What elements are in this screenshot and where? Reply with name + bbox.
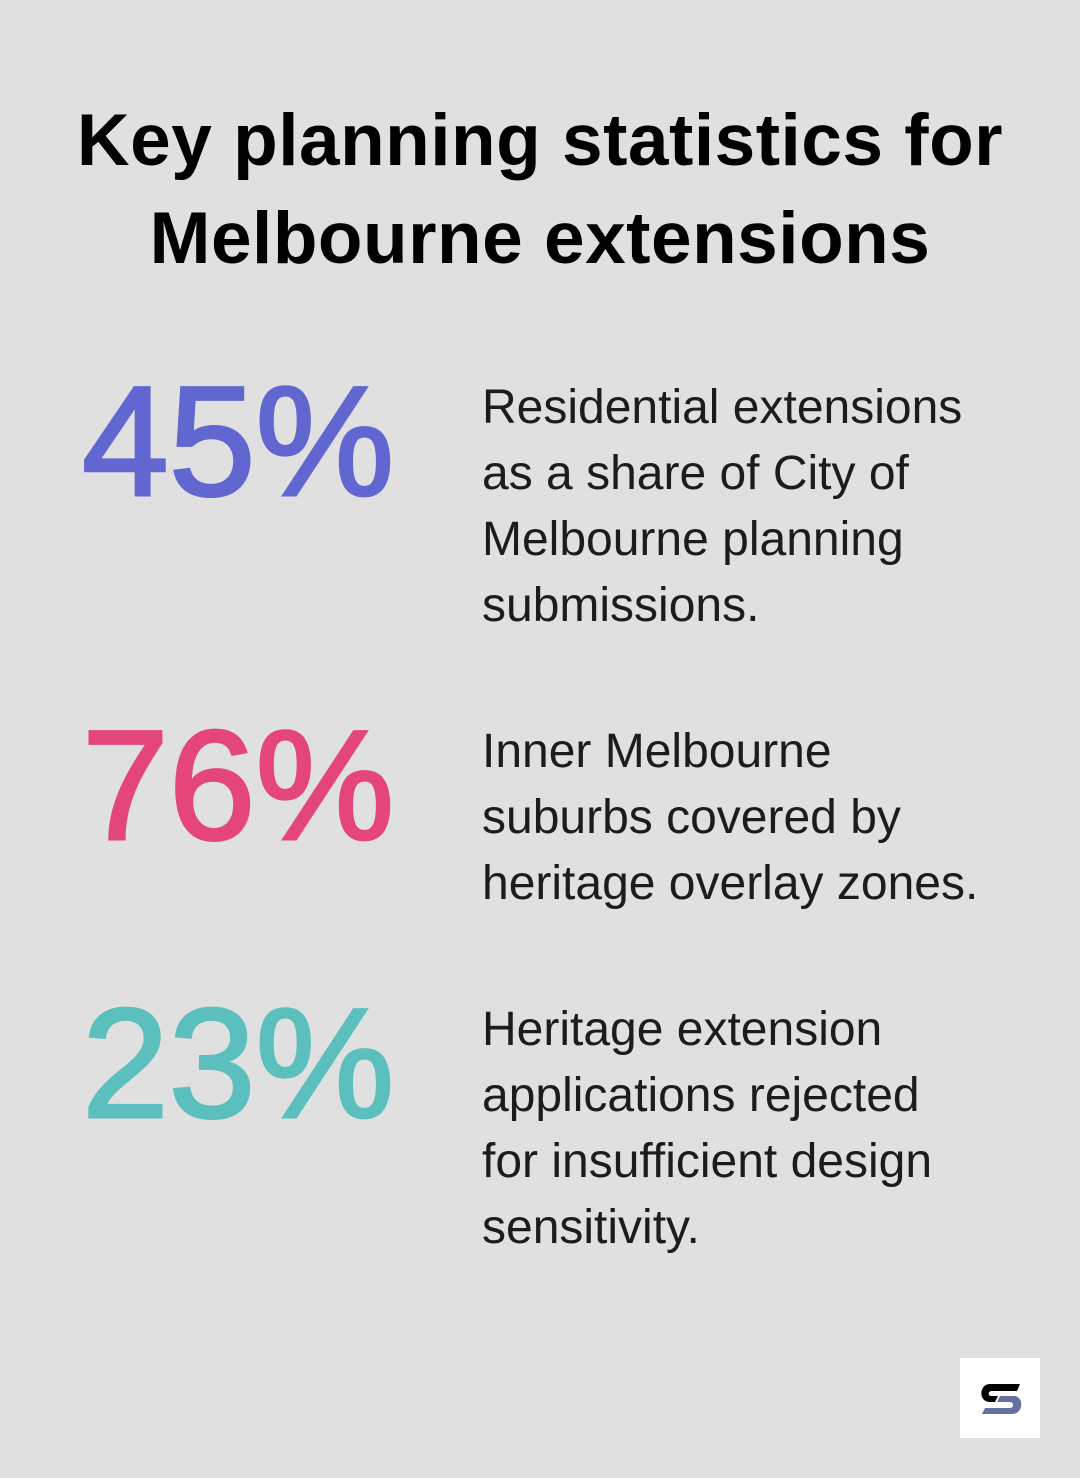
title: Key planning statistics for xyxy=(77,100,1003,181)
stat 2 text: Inner Melbourne xyxy=(482,725,832,778)
stat 2 number: 76% xyxy=(82,699,394,873)
stat 1 text: Residential extensions xyxy=(482,381,962,434)
title: Melbourne extensions xyxy=(150,198,930,279)
stat 1 text: Melbourne planning xyxy=(482,513,904,566)
logo xyxy=(960,1358,1040,1438)
stat 2 text xyxy=(482,725,978,910)
stat 1 text: as a share of City of xyxy=(482,447,909,500)
stat 3 text: sensitivity. xyxy=(482,1201,700,1254)
stat 1 text xyxy=(482,381,962,632)
stat 3 number: 23% xyxy=(82,977,394,1151)
stat 1 number: 45% xyxy=(82,355,394,529)
stat 1 text: submissions. xyxy=(482,579,759,632)
stat 3 text: Heritage extension xyxy=(482,1003,882,1056)
stat 3 text: applications rejected xyxy=(482,1069,920,1122)
stat 2 text: suburbs covered by xyxy=(482,791,901,844)
title xyxy=(77,100,1003,279)
stat 3 text xyxy=(482,1003,932,1254)
stat 3 text: for insufficient design xyxy=(482,1135,932,1188)
stat 2 text: heritage overlay zones. xyxy=(482,857,978,910)
